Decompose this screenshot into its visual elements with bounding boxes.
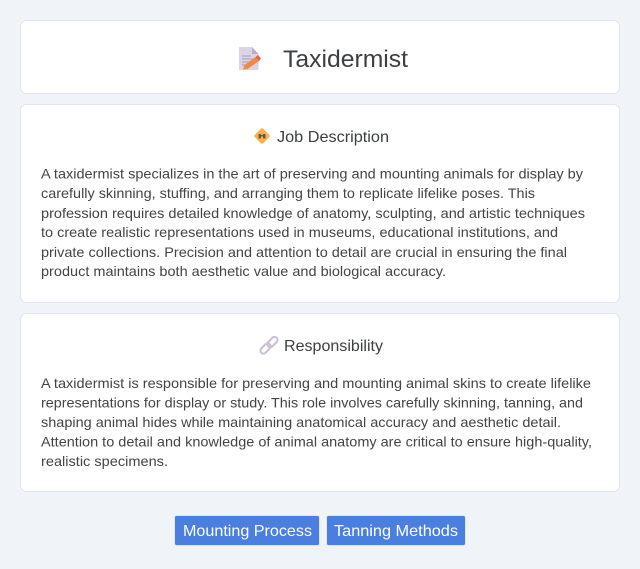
panel: title bbox=[20, 20, 620, 94]
text block: job description: carefully skinning, stuffing, and arranging them to replicate lifelike poses. This bbox=[41, 185, 535, 201]
text block: responsibility: A taxidermist is responsible for preserving and mounting animal skins to create lifelike bbox=[41, 375, 591, 391]
icon: orange diamond sign bbox=[254, 128, 270, 144]
text block: job description: private collections. Precision and attention to detail are crucial in ensuring the final bbox=[41, 244, 567, 260]
button: mounting process bbox=[174, 516, 320, 546]
text block: job description: product maintains both aesthetic value and biological accuracy. bbox=[41, 263, 446, 279]
text block: job description: A taxidermist specializes in the art of preserving and mounting animals for display by bbox=[41, 166, 583, 182]
button: tanning methods bbox=[326, 516, 466, 546]
text block: responsibility bbox=[41, 375, 592, 469]
icon: document with pencil bbox=[239, 47, 261, 70]
text block: responsibility: shaping animal hides while maintaining anatomical accuracy and aesthetic detail. bbox=[41, 414, 561, 430]
text block: job description: profession requires detailed knowledge of anatomy, sculpting, and artistic techniques bbox=[41, 205, 585, 221]
heading: responsibility: Responsibility bbox=[284, 338, 383, 355]
text block: responsibility: Attention to detail and knowledge of animal anatomy are critical to ensure high-quality, bbox=[41, 434, 592, 450]
panel: job description bbox=[20, 104, 620, 302]
button: mounting process: Mounting Process bbox=[183, 523, 312, 540]
title text: Taxidermist bbox=[283, 46, 408, 73]
icon: chain link bbox=[259, 336, 279, 355]
text block: responsibility: realistic specimens. bbox=[41, 453, 168, 469]
panel: responsibility bbox=[20, 314, 620, 492]
heading: job description: Job Description bbox=[277, 129, 389, 146]
text block: responsibility: representations for display or study. This role involves carefully skinning, tanning, and bbox=[41, 394, 583, 410]
text block: job description: to create realistic representations used in museums, educational institutions, and bbox=[41, 224, 558, 240]
button: tanning methods: Tanning Methods bbox=[334, 523, 458, 540]
text block: job description bbox=[41, 166, 585, 279]
